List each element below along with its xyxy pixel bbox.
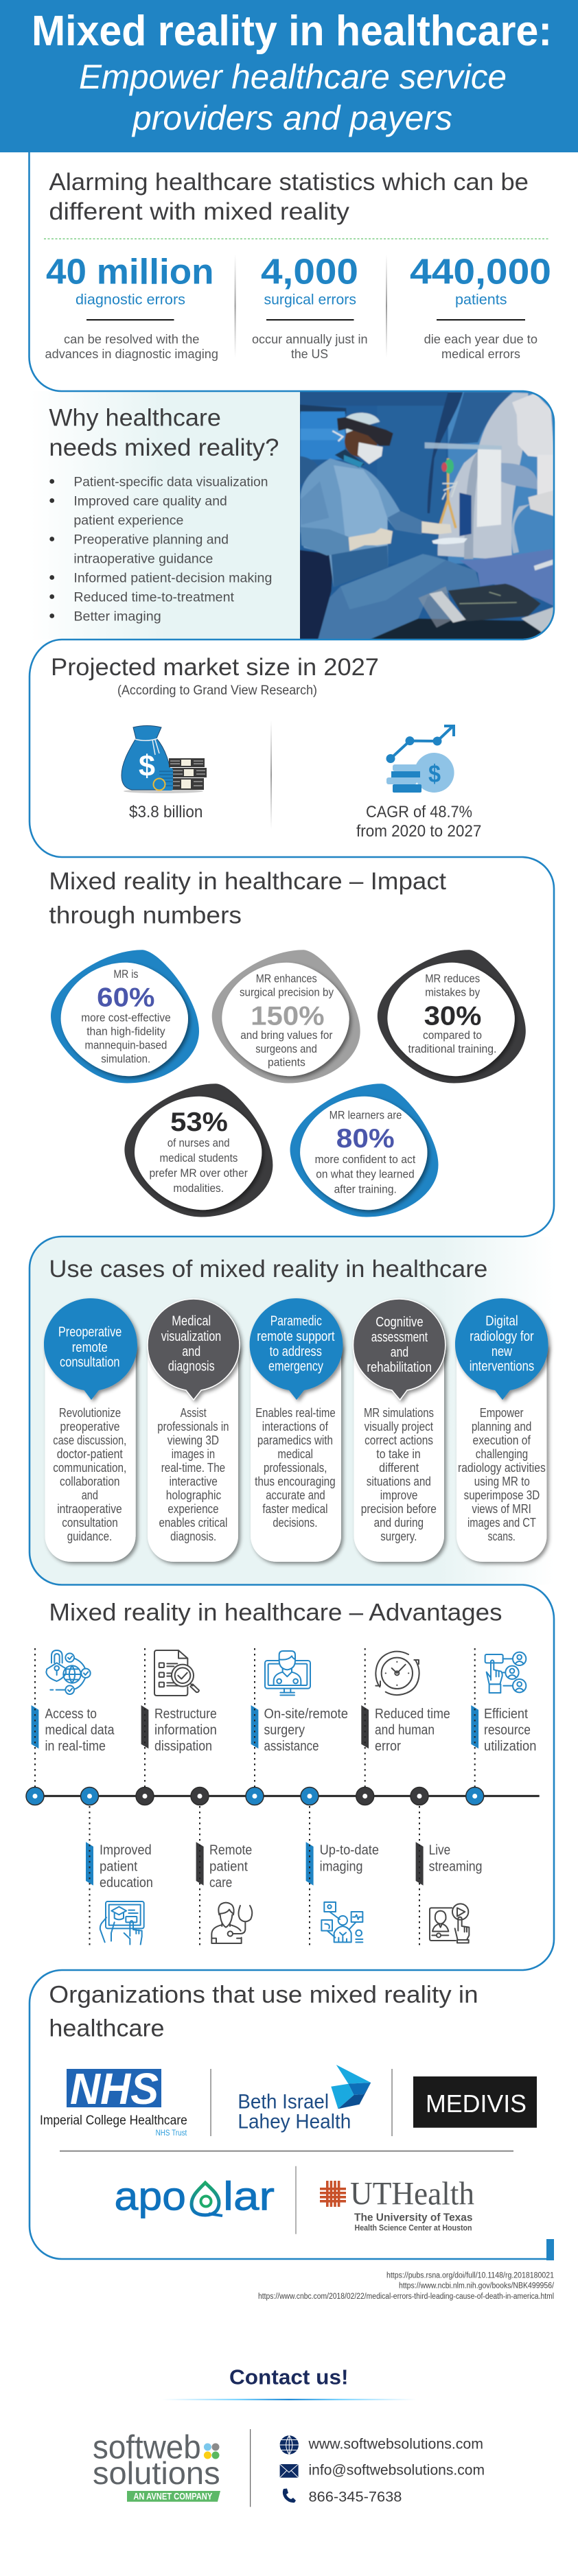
card: digital radiology for new interventions: superimpose 3D xyxy=(464,1488,540,1502)
icon: improved patient education xyxy=(100,1901,144,1945)
panel border line xyxy=(29,152,554,2259)
card: paramedic remote support: paramedics with xyxy=(257,1433,333,1447)
card: cognitive assessment and rehabilitation: improve xyxy=(380,1488,417,1502)
label: live streaming: Live xyxy=(429,1843,450,1858)
label: live streaming: streaming xyxy=(429,1860,482,1875)
contact heading: Contact us! xyxy=(229,2365,349,2389)
label: efficient resource utilization: Efficient xyxy=(484,1707,528,1722)
heading: Mixed reality in healthcare – Impact xyxy=(49,868,446,895)
card: preoperative remote consultation: and xyxy=(82,1488,98,1502)
label: live streaming xyxy=(429,1843,482,1875)
icon: efficient resource utilization xyxy=(485,1652,526,1693)
label: restructure information: Restructure xyxy=(154,1707,217,1722)
stat: 4,000: surgical errors xyxy=(264,292,356,308)
card: cognitive assessment and rehabilitation: MR simulations xyxy=(364,1406,434,1420)
card: digital radiology for new interventions: new xyxy=(492,1344,512,1359)
card: paramedic remote support: remote support xyxy=(257,1329,335,1344)
subtitle: Empower healthcare service xyxy=(79,58,507,96)
heading xyxy=(49,1981,478,2041)
heading: different with mixed reality xyxy=(49,198,350,225)
logo: Medivis xyxy=(413,2076,537,2128)
card: medical visualization and diagnosis: enables critical xyxy=(159,1516,227,1530)
logo: softweb solutions xyxy=(93,2430,220,2502)
card: digital radiology for new interventions: Digital xyxy=(485,1314,518,1329)
label: improved patient education: education xyxy=(100,1875,153,1890)
card: cognitive assessment and rehabilitation: situations and xyxy=(367,1475,431,1488)
panel: impact through numbers xyxy=(49,868,526,1217)
logo: UTHealth: The University of Texas xyxy=(354,2212,473,2224)
contact details: www.softwebsolutions.com xyxy=(308,2437,483,2452)
stat bubble: 150%: and bring values for xyxy=(240,1029,333,1042)
logo: NHS Imperial College Healthcare: Imperial College Healthcare xyxy=(40,2114,187,2128)
card: preoperative remote consultation: remote xyxy=(72,1340,108,1355)
stat bubble: 30%: mistakes by xyxy=(425,987,481,999)
logo: apoQlar: lar xyxy=(223,2175,275,2219)
card: cognitive assessment and rehabilitation: surgery. xyxy=(380,1530,417,1543)
label: CAGR: from 2020 to 2027 xyxy=(356,822,481,841)
label: remote patient care: Remote xyxy=(209,1843,252,1858)
card: preoperative remote consultation: consultation xyxy=(60,1355,119,1370)
label: remote surgery assistance: surgery xyxy=(264,1722,305,1737)
logo: UTHealth: UTHealth xyxy=(350,2176,474,2212)
logo: softweb solutions: AN AVNET COMPANY xyxy=(133,2492,212,2502)
card: preoperative remote consultation: doctor-patient xyxy=(57,1447,123,1461)
label: access to medical data xyxy=(45,1707,115,1754)
stat: 40 million: diagnostic errors xyxy=(76,292,185,308)
icon: globe xyxy=(280,2435,299,2455)
label: remote patient care: care xyxy=(209,1875,232,1890)
bullet list: intraoperative guidance xyxy=(73,552,213,567)
card: preoperative remote consultation: guidance. xyxy=(67,1530,112,1543)
card: preoperative remote consultation: communication, xyxy=(53,1461,126,1475)
label: up-to-date imaging xyxy=(320,1843,379,1875)
label: market size: $3.8 billion xyxy=(129,803,203,821)
stat bubble: 80%: MR learners are xyxy=(330,1110,402,1122)
source references xyxy=(258,2271,555,2301)
logo: apoQlar xyxy=(114,2175,275,2219)
stat bubble: 80%: on what they learned xyxy=(316,1168,415,1180)
label: remote surgery assistance: assistance xyxy=(264,1739,319,1754)
card: digital radiology for new interventions: using MR to xyxy=(474,1475,530,1488)
label: up-to-date imaging: Up-to-date xyxy=(320,1843,379,1858)
heading: healthcare xyxy=(49,2015,165,2041)
card: medical visualization and diagnosis xyxy=(148,1299,240,1562)
stat bubble: 150%: 150% xyxy=(251,1001,325,1031)
card: cognitive assessment and rehabilitation: to take in xyxy=(376,1447,421,1461)
card: preoperative remote consultation xyxy=(44,1298,137,1562)
stat: 4,000: occur annually just in xyxy=(252,333,368,347)
source references: https://www.cnbc.com/2018/02/22/medical-errors-third-leading-cause-of-death-in-america.html xyxy=(258,2293,554,2301)
card: medical visualization and diagnosis: interactive xyxy=(169,1475,218,1488)
logo: UTHealth xyxy=(320,2176,474,2233)
stat bubble: 60%: MR is xyxy=(113,968,138,981)
logo: apoQlar: apo xyxy=(114,2175,186,2219)
label: reduced time: and human xyxy=(375,1722,435,1737)
stat bubble: 150%: surgical precision by xyxy=(240,987,334,999)
stat: 440,000: medical errors xyxy=(441,347,520,361)
card: medical visualization and diagnosis: viewing 3D xyxy=(167,1433,219,1447)
card: cognitive assessment and rehabilitation: and during xyxy=(374,1516,424,1530)
subtitle: providers and payers xyxy=(131,99,452,137)
bullet list: Better imaging xyxy=(73,609,161,624)
icon: up-to-date imaging xyxy=(321,1902,362,1942)
card: cognitive assessment and rehabilitation xyxy=(353,1299,446,1562)
stat bubble: 30%: compared to xyxy=(423,1029,482,1042)
card: cognitive assessment and rehabilitation: Cognitive xyxy=(375,1315,424,1330)
heading: Alarming healthcare statistics which can be xyxy=(49,169,529,196)
card: digital radiology for new interventions: radiology activities xyxy=(458,1461,546,1475)
icon: live streaming xyxy=(430,1904,469,1943)
stat: 440,000 xyxy=(410,253,551,361)
card: medical visualization and diagnosis: real-time. The xyxy=(161,1461,225,1475)
stat bubble: 80% xyxy=(290,1084,438,1217)
stat bubble: 53%: prefer MR over other xyxy=(150,1167,248,1180)
bullet list: Improved care quality and xyxy=(73,494,227,509)
panel: why background xyxy=(29,391,301,640)
stat bubble: 30% xyxy=(378,950,526,1083)
heading: Mixed reality in healthcare – Advantages xyxy=(49,1600,502,1626)
logo: NHS Imperial College Healthcare xyxy=(40,2064,187,2138)
label: remote patient care xyxy=(209,1843,252,1890)
card: medical visualization and diagnosis: holographic xyxy=(166,1488,221,1502)
photo: surgeon with mixed reality headset xyxy=(299,390,556,641)
timeline xyxy=(26,1787,540,1805)
stat bubble: 53% xyxy=(124,1084,273,1217)
contact details xyxy=(280,2435,485,2505)
icon: restructure information xyxy=(154,1650,199,1696)
bullet list: Preoperative planning and xyxy=(73,532,229,547)
heading xyxy=(49,868,446,928)
card: paramedic remote support: Paramedic xyxy=(270,1314,322,1329)
logo: Medivis: MEDIVIS xyxy=(426,2089,527,2118)
panel: advantages xyxy=(26,1600,540,1945)
heading: Projected market size in 2027 xyxy=(51,654,379,681)
card: preoperative remote consultation: intraoperative xyxy=(57,1502,122,1516)
stat bubble: 30%: traditional training. xyxy=(408,1043,496,1055)
timeline connectors xyxy=(35,1648,475,1945)
card: cognitive assessment and rehabilitation: visually project xyxy=(365,1420,433,1433)
accent bars xyxy=(32,1705,478,1886)
label: access to medical data: medical data xyxy=(45,1722,115,1737)
heading: Use cases of mixed reality in healthcare xyxy=(49,1256,487,1283)
stat bubble: 80%: after training. xyxy=(334,1184,397,1196)
heading: needs mixed reality? xyxy=(49,434,279,461)
logo: softweb solutions: solutions xyxy=(93,2455,220,2491)
stat bubble: 30%: MR reduces xyxy=(425,973,480,985)
stat bubble: 80%: more confident to act xyxy=(315,1154,416,1166)
card: medical visualization and diagnosis: visualization xyxy=(161,1329,221,1344)
bullet list: Patient-specific data visualization xyxy=(73,474,268,489)
panel: use cases background xyxy=(30,1237,554,1585)
logo: Beth Israel Lahey Health: Lahey Health xyxy=(238,2111,351,2133)
icon: money bag: $ xyxy=(139,749,155,783)
card: digital radiology for new interventions: views of MRI xyxy=(472,1502,531,1516)
stat bubble: 80%: 80% xyxy=(336,1124,395,1154)
card: paramedic remote support: to address xyxy=(270,1344,322,1359)
label: remote surgery assistance xyxy=(264,1707,348,1754)
label: restructure information: information xyxy=(154,1722,217,1737)
card: medical visualization and diagnosis: and xyxy=(182,1344,200,1359)
stat: 440,000: patients xyxy=(455,292,507,308)
card: digital radiology for new interventions: challenging xyxy=(476,1447,528,1461)
icon: access to medical data xyxy=(46,1650,91,1694)
icon: remote patient care xyxy=(211,1903,252,1943)
card: digital radiology for new interventions: planning and xyxy=(472,1420,531,1433)
stat: 40 million: 40 million xyxy=(46,253,214,292)
source references: https://www.ncbi.nlm.nih.gov/books/NBK499956/ xyxy=(399,2282,555,2291)
label: remote patient care: patient xyxy=(209,1860,248,1875)
panel: alarming statistics xyxy=(44,169,551,361)
card: paramedic remote support: Enables real-time xyxy=(255,1406,336,1420)
logo: NHS Imperial College Healthcare: NHS Trust xyxy=(156,2128,187,2138)
card: paramedic remote support: emergency xyxy=(268,1359,323,1374)
card: medical visualization and diagnosis: diagnosis. xyxy=(170,1530,216,1543)
card: digital radiology for new interventions xyxy=(455,1298,548,1562)
stat bubble: 53%: medical students xyxy=(159,1152,238,1164)
stat bubble: 150%: patients xyxy=(268,1057,305,1069)
card: preoperative remote consultation: consultation xyxy=(62,1516,118,1530)
contact details: info@softwebsolutions.com xyxy=(309,2463,485,2479)
card: medical visualization and diagnosis: experience xyxy=(167,1502,218,1516)
card: medical visualization and diagnosis: professionals in xyxy=(157,1420,229,1433)
stat bubble: 60%: mannequin-based xyxy=(85,1040,167,1052)
card: preoperative remote consultation: Preoperative xyxy=(58,1325,122,1340)
label: up-to-date imaging: imaging xyxy=(320,1860,362,1875)
heading: Organizations that use mixed reality in xyxy=(49,1981,478,2008)
label: improved patient education: patient xyxy=(100,1860,138,1875)
corner stub xyxy=(546,2239,554,2260)
card: preoperative remote consultation: Revolutionize xyxy=(59,1406,121,1420)
panel: projected market size xyxy=(51,654,481,841)
card: cognitive assessment and rehabilitation: precision before xyxy=(361,1502,437,1516)
card: medical visualization and diagnosis: diagnosis xyxy=(168,1359,215,1374)
icon: money bag xyxy=(122,726,207,793)
stat: 40 million: advances in diagnostic imaging xyxy=(45,347,218,361)
stat: 4,000: 4,000 xyxy=(261,253,358,292)
card: paramedic remote support: accurate and xyxy=(266,1488,325,1502)
bullet list xyxy=(49,474,272,624)
label: CAGR xyxy=(356,803,481,841)
card: cognitive assessment and rehabilitation: assessment xyxy=(371,1330,428,1345)
card: paramedic remote support: medical xyxy=(277,1447,313,1461)
stat: 40 million: can be resolved with the xyxy=(64,333,199,347)
card: digital radiology for new interventions: Empower xyxy=(480,1406,524,1420)
stat bubble: 150%: MR enhances xyxy=(256,973,317,985)
panel: use cases xyxy=(44,1256,548,1562)
card: paramedic remote support: professionals, xyxy=(264,1461,327,1475)
stat bubble: 60%: simulation. xyxy=(101,1053,150,1065)
card: preoperative remote consultation: collaboration xyxy=(60,1475,119,1488)
label: efficient resource utilization: resource xyxy=(484,1722,531,1737)
card: preoperative remote consultation: case discussion, xyxy=(53,1433,126,1447)
stat bubble: 53%: of nurses and xyxy=(167,1137,230,1149)
card: medical visualization and diagnosis: Assist xyxy=(181,1406,207,1420)
heading xyxy=(49,405,279,461)
logo: Beth Israel Lahey Health: Beth Israel xyxy=(238,2091,329,2114)
icon: envelope xyxy=(280,2464,299,2478)
label: improved patient education: Improved xyxy=(100,1843,152,1858)
source note: (According to Grand View Research) xyxy=(117,683,317,698)
card: cognitive assessment and rehabilitation: correct actions xyxy=(365,1433,433,1447)
label: restructure information xyxy=(154,1707,217,1754)
icon: growth chart with coin xyxy=(386,726,454,793)
heading: through numbers xyxy=(49,902,242,928)
card: medical visualization and diagnosis: images in xyxy=(172,1447,215,1461)
stat bubble: 150% xyxy=(212,950,360,1083)
card: digital radiology for new interventions: radiology for xyxy=(470,1329,534,1344)
card: paramedic remote support: decisions. xyxy=(273,1516,317,1530)
icon: reduced time xyxy=(375,1652,419,1695)
card: cognitive assessment and rehabilitation: and xyxy=(391,1345,408,1360)
card: digital radiology for new interventions: interventions xyxy=(470,1359,534,1374)
label: restructure information: dissipation xyxy=(154,1739,212,1754)
label: access to medical data: Access to xyxy=(45,1707,97,1722)
label: reduced time: Reduced time xyxy=(375,1707,450,1722)
card: paramedic remote support: faster medical xyxy=(262,1502,328,1516)
logo: NHS Imperial College Healthcare: NHS xyxy=(70,2064,159,2114)
stat bubble: 60% xyxy=(51,950,199,1083)
stat: 4,000: the US xyxy=(291,347,328,361)
bullet list: patient experience xyxy=(73,513,183,528)
label: efficient resource utilization xyxy=(484,1707,536,1754)
label: reduced time xyxy=(375,1707,450,1754)
card: paramedic remote support: interactions of xyxy=(262,1420,329,1433)
card: preoperative remote consultation: preoperative xyxy=(60,1420,119,1433)
panel: why healthcare needs mixed reality xyxy=(49,390,556,641)
subtitle xyxy=(79,58,507,137)
stat bubble: 60%: than high-fidelity xyxy=(86,1026,165,1038)
stat: 4,000 xyxy=(252,253,368,361)
label: efficient resource utilization: utilization xyxy=(484,1739,536,1754)
stat bubble: 60%: more cost-effective xyxy=(81,1012,171,1024)
card: digital radiology for new interventions: images and CT xyxy=(467,1516,536,1530)
heading: Why healthcare xyxy=(49,405,221,432)
card: digital radiology for new interventions: execution of xyxy=(472,1433,531,1447)
logo: UTHealth: Health Science Center at Houston xyxy=(354,2223,472,2233)
stat bubble: 60%: 60% xyxy=(97,983,155,1012)
label: improved patient education xyxy=(100,1843,153,1890)
heading xyxy=(49,169,529,225)
logo: Beth Israel Lahey Health xyxy=(238,2065,371,2133)
title: Mixed reality in healthcare: xyxy=(32,8,552,55)
label: access to medical data: in real-time xyxy=(45,1739,106,1754)
bullet list: Reduced time-to-treatment xyxy=(73,590,235,605)
card: medical visualization and diagnosis: Medical xyxy=(172,1314,211,1329)
label: reduced time: error xyxy=(375,1739,401,1754)
stat: 440,000: die each year due to xyxy=(424,333,537,347)
card: cognitive assessment and rehabilitation: different xyxy=(379,1461,419,1475)
card: cognitive assessment and rehabilitation: rehabilitation xyxy=(367,1360,432,1375)
stat: 40 million xyxy=(45,253,218,361)
header banner xyxy=(0,0,578,152)
label: CAGR: CAGR of 48.7% xyxy=(366,803,472,821)
bullet list: Informed patient-decision making xyxy=(73,570,272,585)
contact details: 866-345-7638 xyxy=(309,2490,402,2505)
label: remote surgery assistance: On-site/remote xyxy=(264,1707,348,1722)
icon: remote surgery assistance xyxy=(265,1651,310,1695)
icon: phone xyxy=(283,2488,296,2503)
panel: organizations xyxy=(40,1981,537,2234)
stat bubble: 53%: modalities. xyxy=(173,1182,224,1195)
stat bubble: 150%: surgeons and xyxy=(255,1043,317,1055)
card: paramedic remote support: thus encouraging xyxy=(255,1475,336,1488)
source references: https://pubs.rsna.org/doi/full/10.1148/rg.2018180021 xyxy=(386,2271,554,2280)
stat: 440,000: 440,000 xyxy=(410,253,551,292)
card: digital radiology for new interventions: scans. xyxy=(487,1530,516,1543)
logo: softweb solutions: softweb xyxy=(93,2430,201,2466)
stat bubble: 30%: 30% xyxy=(424,1001,481,1031)
stat bubble: 53%: 53% xyxy=(170,1108,228,1137)
icon: growth chart with coin: $ xyxy=(428,760,441,788)
card: paramedic remote support xyxy=(250,1298,343,1562)
